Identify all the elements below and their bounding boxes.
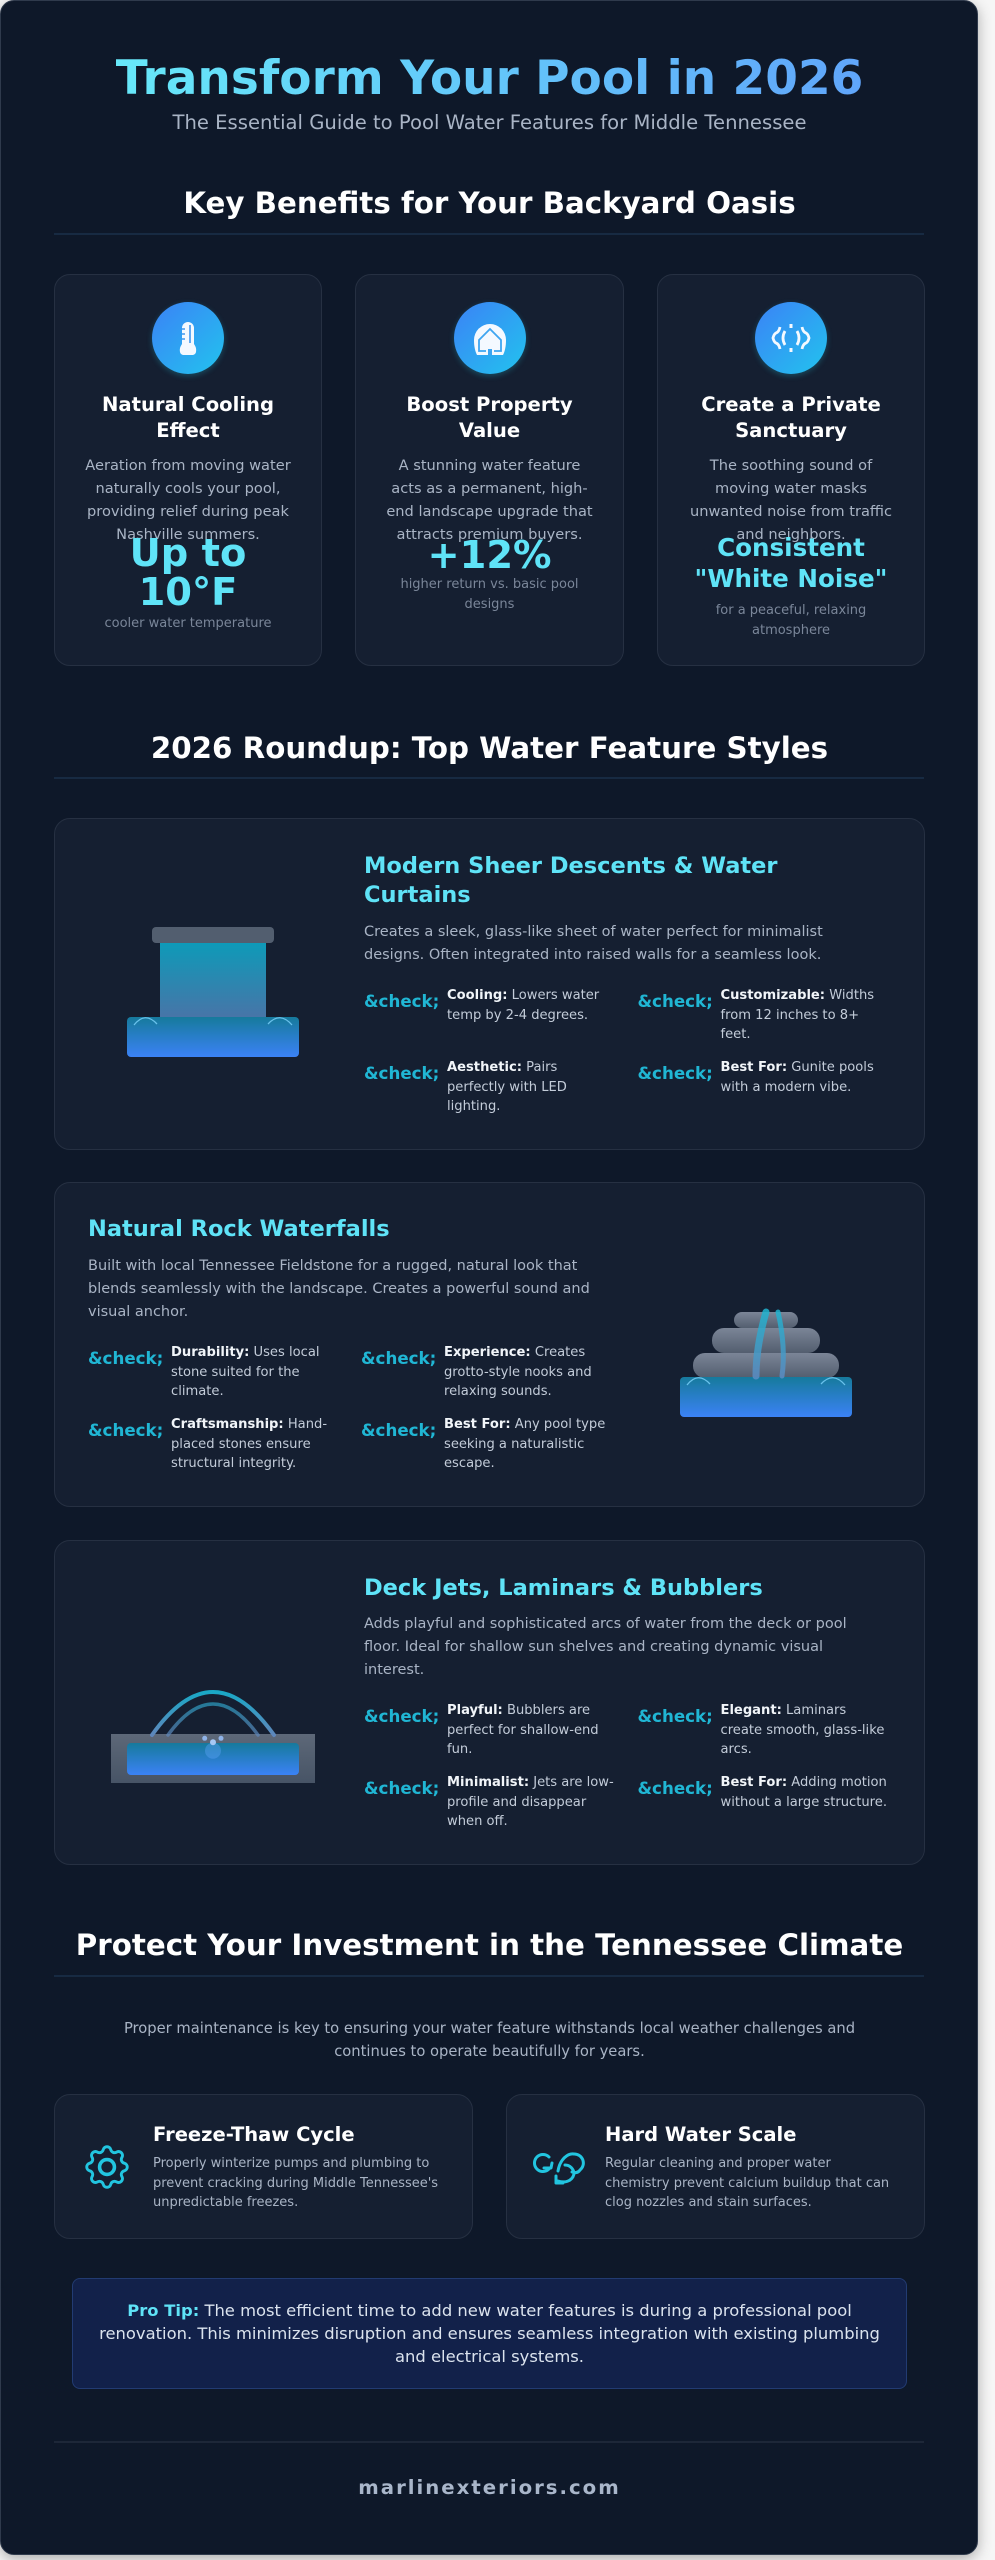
checklist [88, 1345, 605, 1471]
panel: deck jets: perfect for shallow-end [447, 1722, 599, 1738]
stat label: cooler water temperature [104, 616, 272, 631]
panel: sheer descents: feet. [720, 1027, 751, 1042]
stat: up to 10°F: Up to [130, 531, 246, 576]
card description: acts as a permanent, high- [391, 480, 588, 497]
card description: and neighbors. [736, 526, 846, 543]
panel: sheer descents: &check; [364, 991, 439, 1011]
card description: end landscape upgrade that [386, 503, 593, 520]
card description: providing relief during peak [87, 503, 289, 520]
icon: home [454, 302, 526, 374]
panel: rock waterfalls: &check; [88, 1348, 163, 1368]
panel: rock waterfalls: Experience: Creates [444, 1345, 585, 1360]
panel: sheer descents: &check; [364, 1063, 439, 1083]
panel: sheer descents: Aesthetic: Pairs [447, 1060, 557, 1075]
icon: thermometer [152, 302, 224, 374]
panel: sheer descents: perfectly with LED [447, 1080, 567, 1094]
card description: Aeration from moving water [85, 457, 291, 474]
panel: sheer descents: with a modern vibe. [720, 1080, 851, 1094]
icon: sound waves [755, 302, 827, 374]
stat label [716, 603, 866, 638]
checklist [364, 988, 874, 1114]
card description: The soothing sound of [710, 457, 872, 474]
panel: sheer descents: from 12 inches to 8+ [720, 1008, 859, 1022]
intro text: continues to operate beautifully for years. [334, 2043, 645, 2060]
illustration: rock waterfall [680, 1308, 852, 1417]
feature description: Creates a sleek, glass-like sheet of water perfect for minimalist [364, 924, 823, 940]
panel: rock waterfalls: grotto-style nooks and [444, 1364, 592, 1380]
stat label: for a peaceful, relaxing [716, 603, 866, 618]
stat label: designs [465, 597, 514, 612]
stat label: higher return vs. basic pool [400, 577, 579, 592]
panel: deck jets: &check; [638, 1778, 713, 1798]
feature title [364, 853, 778, 908]
feature description: Built with local Tennessee Fieldstone for a rugged, natural look that [88, 1258, 577, 1274]
panel: rock waterfalls: Best For: Any pool type [444, 1417, 605, 1432]
panel: sheer descents: Best For: Gunite pools [720, 1060, 874, 1075]
panel: deck jets: fun. [447, 1742, 472, 1757]
stat: up to 10°F: 10°F [139, 570, 237, 615]
panel: rock waterfalls: escape. [444, 1456, 495, 1471]
subtitle: The Essential Guide to Pool Water Features for Middle Tennessee [172, 111, 807, 134]
panel: rock waterfalls [54, 1182, 925, 1507]
card description: Properly winterize pumps and plumbing to [153, 2156, 429, 2171]
panel: freeze-thaw [54, 2094, 473, 2239]
heading: protect your investment: Protect Your Investment in the Tennessee Climate [76, 1928, 903, 1962]
feature description: visual anchor. [88, 1304, 188, 1320]
card title: Sanctuary [735, 419, 847, 442]
callout: pro tip: renovation. This minimizes disruption and ensures seamless integration with existing plumbing [99, 2324, 880, 2343]
panel: rock waterfalls: climate. [171, 1384, 224, 1399]
panel: deck jets: &check; [638, 1706, 713, 1726]
panel: rock waterfalls: relaxing sounds. [444, 1384, 552, 1399]
feature description: designs. Often integrated into raised walls for a seamless look. [364, 947, 821, 963]
panel: sheer descents: &check; [638, 991, 713, 1011]
panel: rock waterfalls: placed stones ensure [171, 1436, 311, 1452]
card description: unpredictable freezes. [153, 2195, 298, 2210]
panel: deck jets: Playful: Bubblers are [447, 1703, 590, 1718]
panel: rock waterfalls: stone suited for the [171, 1364, 300, 1380]
feature description: floor. Ideal for shallow sun shelves and creating dynamic visual [364, 1639, 823, 1655]
heading: key benefits: Key Benefits for Your Backyard Oasis [183, 186, 796, 220]
card description: A stunning water feature [399, 457, 580, 474]
heading: top water feature styles: 2026 Roundup: Top Water Feature Styles [151, 731, 828, 765]
feature title: Modern Sheer Descents & Water [364, 853, 778, 879]
panel: private sanctuary [657, 274, 925, 666]
illustration: sheer descent [127, 927, 299, 1057]
feature title: Curtains [364, 882, 471, 908]
panel: sheer descents [54, 818, 925, 1150]
panel: deck jets [54, 1540, 925, 1865]
panel: deck jets: &check; [364, 1706, 439, 1726]
panel: hard water scale [506, 2094, 925, 2239]
panel: rock waterfalls: Craftsmanship: Hand- [171, 1417, 327, 1432]
card description [85, 457, 291, 543]
panel: deck jets: when off. [447, 1814, 508, 1829]
panel: sheer descents: Cooling: Lowers water [447, 988, 599, 1003]
card description [690, 457, 892, 543]
card title: Value [459, 419, 520, 442]
feature description: Adds playful and sophisticated arcs of water from the deck or pool [364, 1616, 847, 1632]
panel: deck jets: Minimalist: Jets are low- [447, 1775, 614, 1790]
card description: unwanted noise from traffic [690, 503, 892, 520]
intro text [124, 2020, 855, 2060]
callout: pro tip: Pro Tip: The most efficient time to add new water features is during a professional pool [127, 2301, 852, 2320]
card description: naturally cools your pool, [96, 480, 280, 497]
card title: Create a Private [701, 393, 881, 416]
card title: Freeze-Thaw Cycle [153, 2123, 355, 2146]
illustration: deck jets [111, 1690, 315, 1783]
card description [605, 2156, 889, 2210]
feature title: Natural Rock Waterfalls [88, 1216, 390, 1242]
card description [153, 2156, 438, 2210]
feature description [88, 1258, 590, 1320]
panel: natural cooling effect [54, 274, 322, 666]
panel: deck jets: arcs. [720, 1742, 752, 1757]
stat label [400, 577, 579, 612]
panel: sheer descents: lighting. [447, 1099, 500, 1114]
card description: moving water masks [715, 480, 867, 497]
card description [386, 457, 593, 543]
panel: rock waterfalls: Durability: Uses local [171, 1345, 319, 1360]
title: Transform Your Pool in 2026 [116, 51, 863, 106]
stat: up to 10°F [130, 531, 246, 615]
footer website: marlinexteriors.com [358, 2476, 621, 2499]
card title [406, 393, 573, 442]
feature description [364, 924, 823, 963]
checklist [364, 1703, 887, 1829]
card description: Nashville summers. [116, 526, 260, 543]
feature title: Deck Jets, Laminars & Bubblers [364, 1575, 763, 1601]
card description: clog nozzles and stain surfaces. [605, 2195, 812, 2210]
card description: attracts premium buyers. [396, 526, 582, 543]
stat: white noise [695, 533, 887, 593]
panel: deck jets: without a large structure. [720, 1794, 887, 1810]
intro text: Proper maintenance is key to ensuring your water feature withstands local weather challenges and [124, 2020, 855, 2037]
card title [102, 393, 274, 442]
panel: sheer descents: temp by 2-4 degrees. [447, 1008, 588, 1022]
icon: gear [85, 2145, 129, 2189]
panel: deck jets: profile and disappear [447, 1794, 586, 1810]
panel: rock waterfalls: &check; [361, 1348, 436, 1368]
feature description: blends seamlessly with the landscape. Creates a powerful sound and [88, 1281, 590, 1297]
card title: Boost Property [406, 393, 573, 416]
icon: linked arrows [533, 2152, 585, 2184]
stat: white noise: Consistent [717, 533, 865, 562]
panel: deck jets: create smooth, glass-like [720, 1722, 884, 1738]
panel: boost property value [355, 274, 624, 666]
stat: white noise: "White Noise" [695, 564, 887, 593]
feature description: interest. [364, 1662, 424, 1678]
callout: pro tip: and electrical systems. [395, 2347, 584, 2366]
panel: rock waterfalls: structural integrity. [171, 1456, 296, 1471]
card title: Effect [156, 419, 220, 442]
card title: Natural Cooling [102, 393, 274, 416]
panel: sheer descents: &check; [638, 1063, 713, 1083]
card description: prevent cracking during Middle Tennessee's [153, 2176, 438, 2190]
panel: sheer descents: Customizable: Widths [720, 988, 874, 1003]
card description: Regular cleaning and proper water [605, 2156, 831, 2171]
callout: pro tip [72, 2278, 907, 2389]
panel: rock waterfalls: &check; [361, 1420, 436, 1440]
stat: +12%: +12% [427, 533, 552, 578]
panel: deck jets: Elegant: Laminars [720, 1703, 846, 1718]
panel: deck jets: &check; [364, 1778, 439, 1798]
panel: rock waterfalls: seeking a naturalistic [444, 1436, 584, 1452]
panel: deck jets: Best For: Adding motion [720, 1775, 887, 1790]
card description: chemistry prevent calcium buildup that can [605, 2176, 889, 2190]
feature description [364, 1616, 847, 1678]
card title: Hard Water Scale [605, 2123, 796, 2146]
stat label: atmosphere [752, 623, 830, 638]
card title [701, 393, 881, 442]
panel: rock waterfalls: &check; [88, 1420, 163, 1440]
